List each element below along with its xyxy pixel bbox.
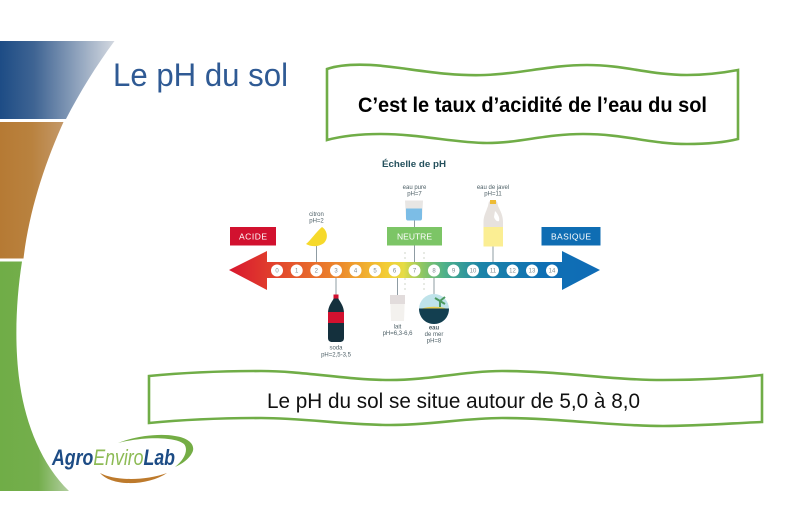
- label: lait: lait: [394, 324, 402, 330]
- label: neutre: NEUTRE: [397, 232, 432, 242]
- scale heading: Échelle de pH: [382, 159, 446, 170]
- arrow: pH gradient scale: [229, 251, 600, 290]
- pH scale numbers: 3: [334, 268, 338, 274]
- label: citron: pH=2: [309, 218, 324, 224]
- band: green segment: [0, 262, 69, 491]
- decorative left band: [0, 41, 114, 491]
- callout: soil pH range: Le pH du sol se situe autour de 5,0 à 8,0: [267, 390, 640, 413]
- pH scale numbers: 5: [373, 268, 377, 274]
- label: acide: [230, 227, 276, 246]
- logo swoosh green: [118, 435, 193, 467]
- pH scale numbers: 2: [315, 268, 319, 274]
- pH scale numbers: 0: [275, 268, 279, 274]
- band: brown segment: [0, 122, 64, 258]
- label: eau pure: eau pure: [403, 185, 427, 191]
- label: eau de javel: pH=11: [484, 192, 502, 198]
- label: acide: ACIDE: [239, 232, 267, 242]
- icon: lemon: [306, 227, 327, 246]
- connector lines: [316, 220, 493, 296]
- label: eau de mer: eau: [429, 326, 440, 332]
- icon: glass of pure water: [405, 200, 423, 220]
- label: neutre: [387, 227, 442, 246]
- pH scale numbers: 9: [452, 268, 456, 274]
- logo: AgroEnviroLab: [51, 435, 193, 483]
- icon: glass of milk: [390, 295, 405, 321]
- logo wordmark: AgroEnviroLab: [51, 445, 175, 470]
- pH scale numbers: [271, 264, 558, 276]
- title: Le pH du sol: [113, 57, 288, 93]
- label: basique: [542, 227, 600, 246]
- label: soda: pH=2,5-3,5: [321, 352, 352, 358]
- callout: definition: C’est le taux d’acidité de l’eau du sol: [358, 93, 707, 117]
- pH scale numbers: 13: [529, 268, 536, 274]
- pH scale numbers: 11: [490, 268, 497, 274]
- icon: sea and island: [419, 294, 449, 324]
- icon: soda bottle: [328, 294, 344, 342]
- label: citron: citron: [309, 212, 324, 218]
- callout: soil pH range: [149, 371, 762, 426]
- pH scale numbers: 8: [432, 268, 436, 274]
- label: soda: soda: [329, 346, 343, 352]
- band: blue segment: [0, 41, 114, 119]
- label: eau pure: pH=7: [407, 192, 422, 198]
- pH scale numbers: 4: [354, 268, 358, 274]
- pH scale numbers: 6: [393, 268, 397, 274]
- pH scale numbers: 7: [413, 268, 417, 274]
- pH scale infographic: [229, 159, 600, 358]
- label: basique: BASIQUE: [551, 232, 591, 242]
- pH scale numbers: 1: [295, 268, 299, 274]
- logo swoosh brown: [100, 473, 167, 483]
- label: eau de javel: eau de javel: [477, 185, 509, 191]
- label: lait: pH=6,3-6,6: [383, 331, 413, 337]
- callout: definition: [327, 65, 738, 144]
- pH scale numbers: 12: [509, 268, 516, 274]
- label: eau de mer: de mer: [425, 332, 443, 338]
- label: eau de mer: pH=8: [427, 338, 442, 344]
- pH scale numbers: 10: [470, 268, 477, 274]
- icon: bleach bottle: [484, 200, 503, 246]
- pH scale numbers: 14: [549, 268, 556, 274]
